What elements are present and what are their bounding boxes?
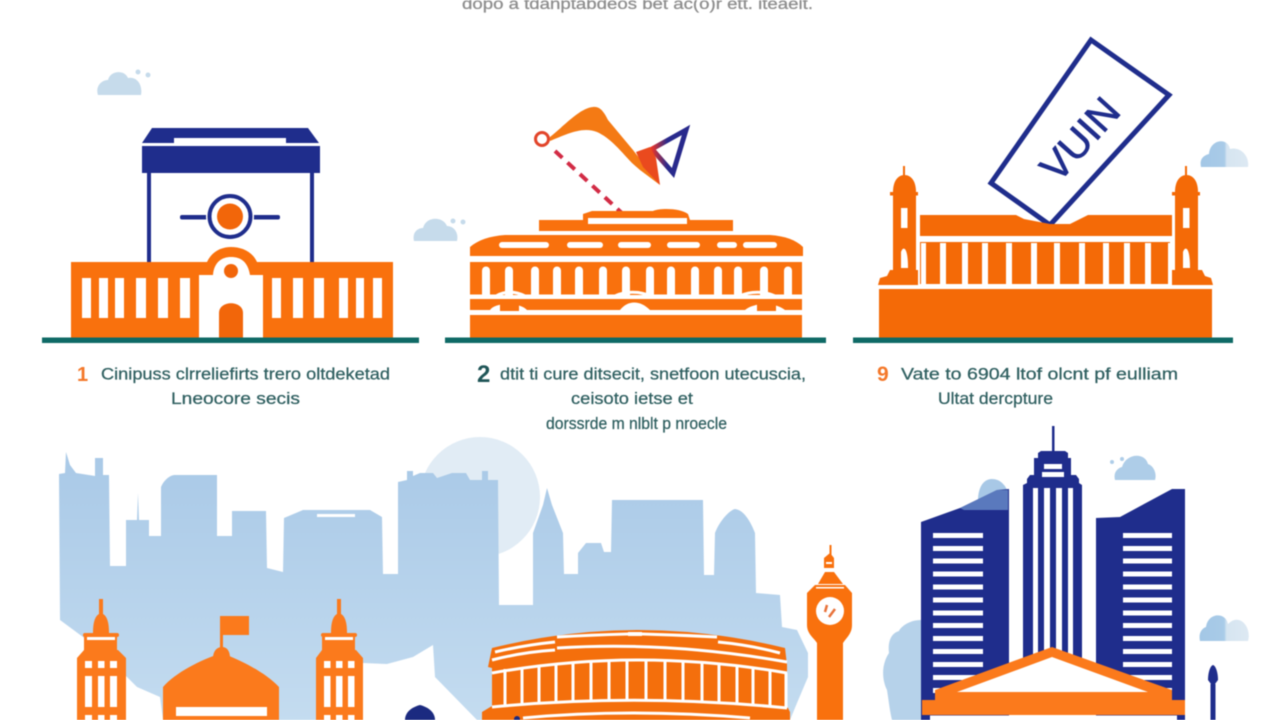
skyscraper: right xyxy=(1096,489,1185,720)
step 2 caption xyxy=(477,361,806,433)
building: hall with arched door xyxy=(71,247,393,338)
icon: cloud right xyxy=(1201,141,1248,167)
right tower xyxy=(1172,166,1200,272)
icon: flag with dashed tether xyxy=(536,107,686,216)
step 2 caption: dtit ti cure ditsecit, snetfoon utecuscia, xyxy=(500,366,806,384)
icon: street lamp xyxy=(1208,665,1218,720)
panel: step 1 ballot box xyxy=(42,70,419,408)
step 2 caption: dorssrde m nlblt p nroecle xyxy=(546,415,727,433)
step 2 caption: ceisoto ietse et xyxy=(571,390,693,408)
skyline silhouette xyxy=(59,452,808,720)
icon: cloud lower right xyxy=(1200,615,1249,641)
dome with flag xyxy=(163,616,279,720)
rooftop highlight xyxy=(317,514,355,517)
icon: cloud left xyxy=(97,70,150,95)
ground line 1 xyxy=(42,338,419,343)
icon: cloud lower left xyxy=(883,620,921,720)
panel: step 3 ballot paper xyxy=(853,40,1248,408)
clock tower xyxy=(807,545,852,720)
step 1 caption: 1 xyxy=(77,364,88,386)
step 1 caption: Lneocore secis xyxy=(171,390,300,408)
step 3 caption: 9 xyxy=(877,363,889,386)
ground line 3 xyxy=(853,338,1233,343)
tower: right orange xyxy=(316,599,363,720)
step 1 caption: Cinipuss clrreliefirts trero oltdeketad xyxy=(101,366,390,384)
step 1 caption xyxy=(77,364,390,408)
step 3 caption: Vate to 6904 ltof olcnt pf eulliam xyxy=(901,366,1178,384)
panel: navy towers xyxy=(883,426,1249,720)
icon: ballot paper: VUIN xyxy=(1032,89,1129,190)
small navy dome xyxy=(405,705,435,720)
tower: left orange xyxy=(77,599,126,720)
building: round parliament xyxy=(482,630,790,720)
icon: cloud middle xyxy=(414,218,466,241)
step 3 caption xyxy=(877,363,1178,408)
icon: cloud behind left tower xyxy=(978,479,1007,510)
ground line 2 xyxy=(445,338,826,343)
step 3 caption: Ultat dercpture xyxy=(938,390,1053,408)
left tower xyxy=(890,166,918,272)
icon: ballot paper xyxy=(991,40,1169,225)
icon: cloud upper right xyxy=(1110,456,1156,480)
building: orange pediment xyxy=(922,647,1185,720)
step 2 caption: 2 xyxy=(477,361,490,388)
building: domed parliament xyxy=(470,209,803,338)
skyscraper: left xyxy=(921,489,1009,720)
skyscraper: centre xyxy=(1023,426,1082,660)
panel: city skyline scene xyxy=(59,437,852,720)
building: colonnaded hall with towers xyxy=(878,166,1213,338)
panel: step 2 flag and parliament xyxy=(414,107,826,433)
icon: pale sun xyxy=(420,437,540,557)
icon: ballot box xyxy=(142,128,320,263)
